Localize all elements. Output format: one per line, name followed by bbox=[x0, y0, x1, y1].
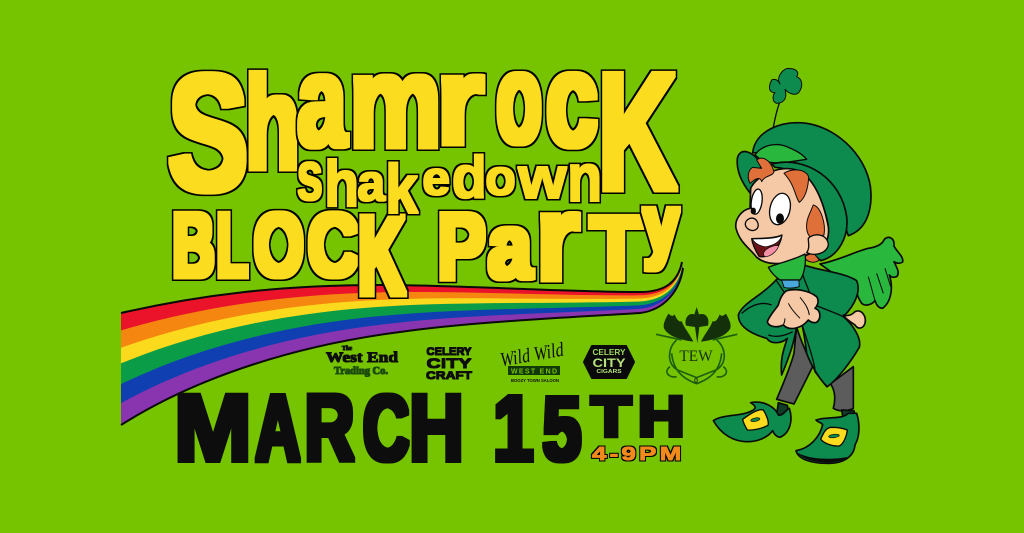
logo: The West End Trading Co.: The bbox=[342, 346, 352, 352]
title: Shamrock: c bbox=[546, 27, 598, 174]
logo: Celery City Craft: CITY bbox=[426, 355, 472, 371]
logo: Celery City Cigars: CELERY bbox=[592, 348, 626, 357]
date: March 15th: C bbox=[363, 376, 409, 480]
title: Shakedown: d bbox=[452, 145, 487, 211]
date: March 15th: H bbox=[638, 385, 685, 447]
title: Shamrock: m bbox=[349, 28, 442, 174]
title: Shakedown: s bbox=[297, 137, 323, 215]
title: Shakedown: o bbox=[485, 150, 516, 206]
nose bbox=[745, 218, 758, 230]
title: Block Party: a bbox=[488, 196, 533, 298]
title: Shakedown: k bbox=[385, 149, 419, 228]
title: Block Party: T bbox=[590, 197, 642, 299]
hat bbox=[753, 123, 871, 236]
title: Shamrock: a bbox=[298, 30, 348, 174]
title: Shamrock: r bbox=[436, 32, 484, 170]
date: March 15th: 1 bbox=[493, 376, 534, 481]
hair bbox=[748, 158, 774, 183]
coat bbox=[738, 263, 860, 387]
logo: Wild Wild West End bbox=[499, 339, 566, 383]
logo: Celery City Cigars: CIGARS bbox=[596, 369, 622, 375]
shoes and legs bbox=[713, 263, 865, 463]
date: March 15th: T bbox=[591, 385, 631, 447]
logo: TEW crest: TEW bbox=[679, 348, 713, 365]
title: Shamrock: h bbox=[245, 49, 300, 197]
rainbow bbox=[121, 262, 683, 425]
time: 4-9PM: 4-9PM bbox=[592, 443, 681, 464]
logo: The West End Trading Co.: Trading Co. bbox=[334, 366, 389, 377]
collar bbox=[768, 254, 805, 280]
head and hat bbox=[736, 68, 871, 280]
face bbox=[736, 169, 829, 263]
logo: TEW crest bbox=[656, 307, 737, 385]
date: March 15th: 5 bbox=[542, 379, 581, 480]
title: Shakedown bbox=[297, 137, 602, 228]
title: Block Party: C bbox=[308, 195, 358, 294]
title: Block Party: O bbox=[254, 196, 304, 295]
title: Block Party bbox=[172, 170, 679, 319]
title: Shakedown: e bbox=[422, 153, 450, 205]
date: March 15th: A bbox=[256, 374, 300, 481]
date: March 15th bbox=[174, 374, 685, 482]
logo: Celery City Craft: CRAFT bbox=[426, 370, 472, 382]
title: Shamrock: S bbox=[168, 40, 248, 225]
logo: Wild Wild West End: BOOZY TOWN SALOON bbox=[511, 378, 559, 383]
title: Shamrock bbox=[168, 27, 677, 226]
title: Shamrock: K bbox=[598, 39, 677, 226]
fist bbox=[767, 290, 820, 329]
logo: Wild Wild West End: WEST END bbox=[511, 368, 557, 376]
title: Shakedown: a bbox=[357, 154, 386, 212]
title: Shakedown: w bbox=[517, 146, 567, 210]
title: Shakedown: h bbox=[324, 147, 359, 220]
date: March 15th: R bbox=[304, 375, 354, 481]
mouth bbox=[752, 235, 782, 257]
title: Shamrock: o bbox=[496, 29, 542, 171]
shamrock bbox=[771, 103, 779, 143]
date: March 15th: M bbox=[174, 375, 252, 482]
title: Block Party: K bbox=[358, 193, 405, 319]
logo: Celery City Craft: CELERY bbox=[426, 346, 472, 358]
logo: Celery City Craft bbox=[426, 346, 472, 382]
date: March 15th: H bbox=[409, 375, 464, 481]
title: Block Party: r bbox=[536, 170, 580, 306]
leprechaun character bbox=[713, 68, 903, 463]
eyes bbox=[750, 188, 764, 215]
glove behind: bright green bbox=[820, 237, 903, 308]
logo: The West End Trading Co.: West End bbox=[326, 350, 399, 366]
logo: TEW crest: 0 bbox=[694, 376, 698, 385]
title: Shakedown: n bbox=[567, 140, 602, 216]
logo: Celery City Cigars: CITY bbox=[592, 358, 626, 370]
logo: Celery City Cigars bbox=[584, 346, 634, 378]
title: Block Party: P bbox=[438, 193, 486, 299]
logo: The West End Trading Co. bbox=[326, 346, 399, 377]
title: Block Party: B bbox=[172, 195, 214, 297]
title: Block Party: y bbox=[644, 177, 679, 271]
logo: Wild Wild West End: Wild Wild bbox=[499, 339, 566, 371]
back hand bbox=[843, 311, 865, 328]
title: Block Party: L bbox=[217, 195, 248, 296]
ear bbox=[807, 235, 828, 254]
